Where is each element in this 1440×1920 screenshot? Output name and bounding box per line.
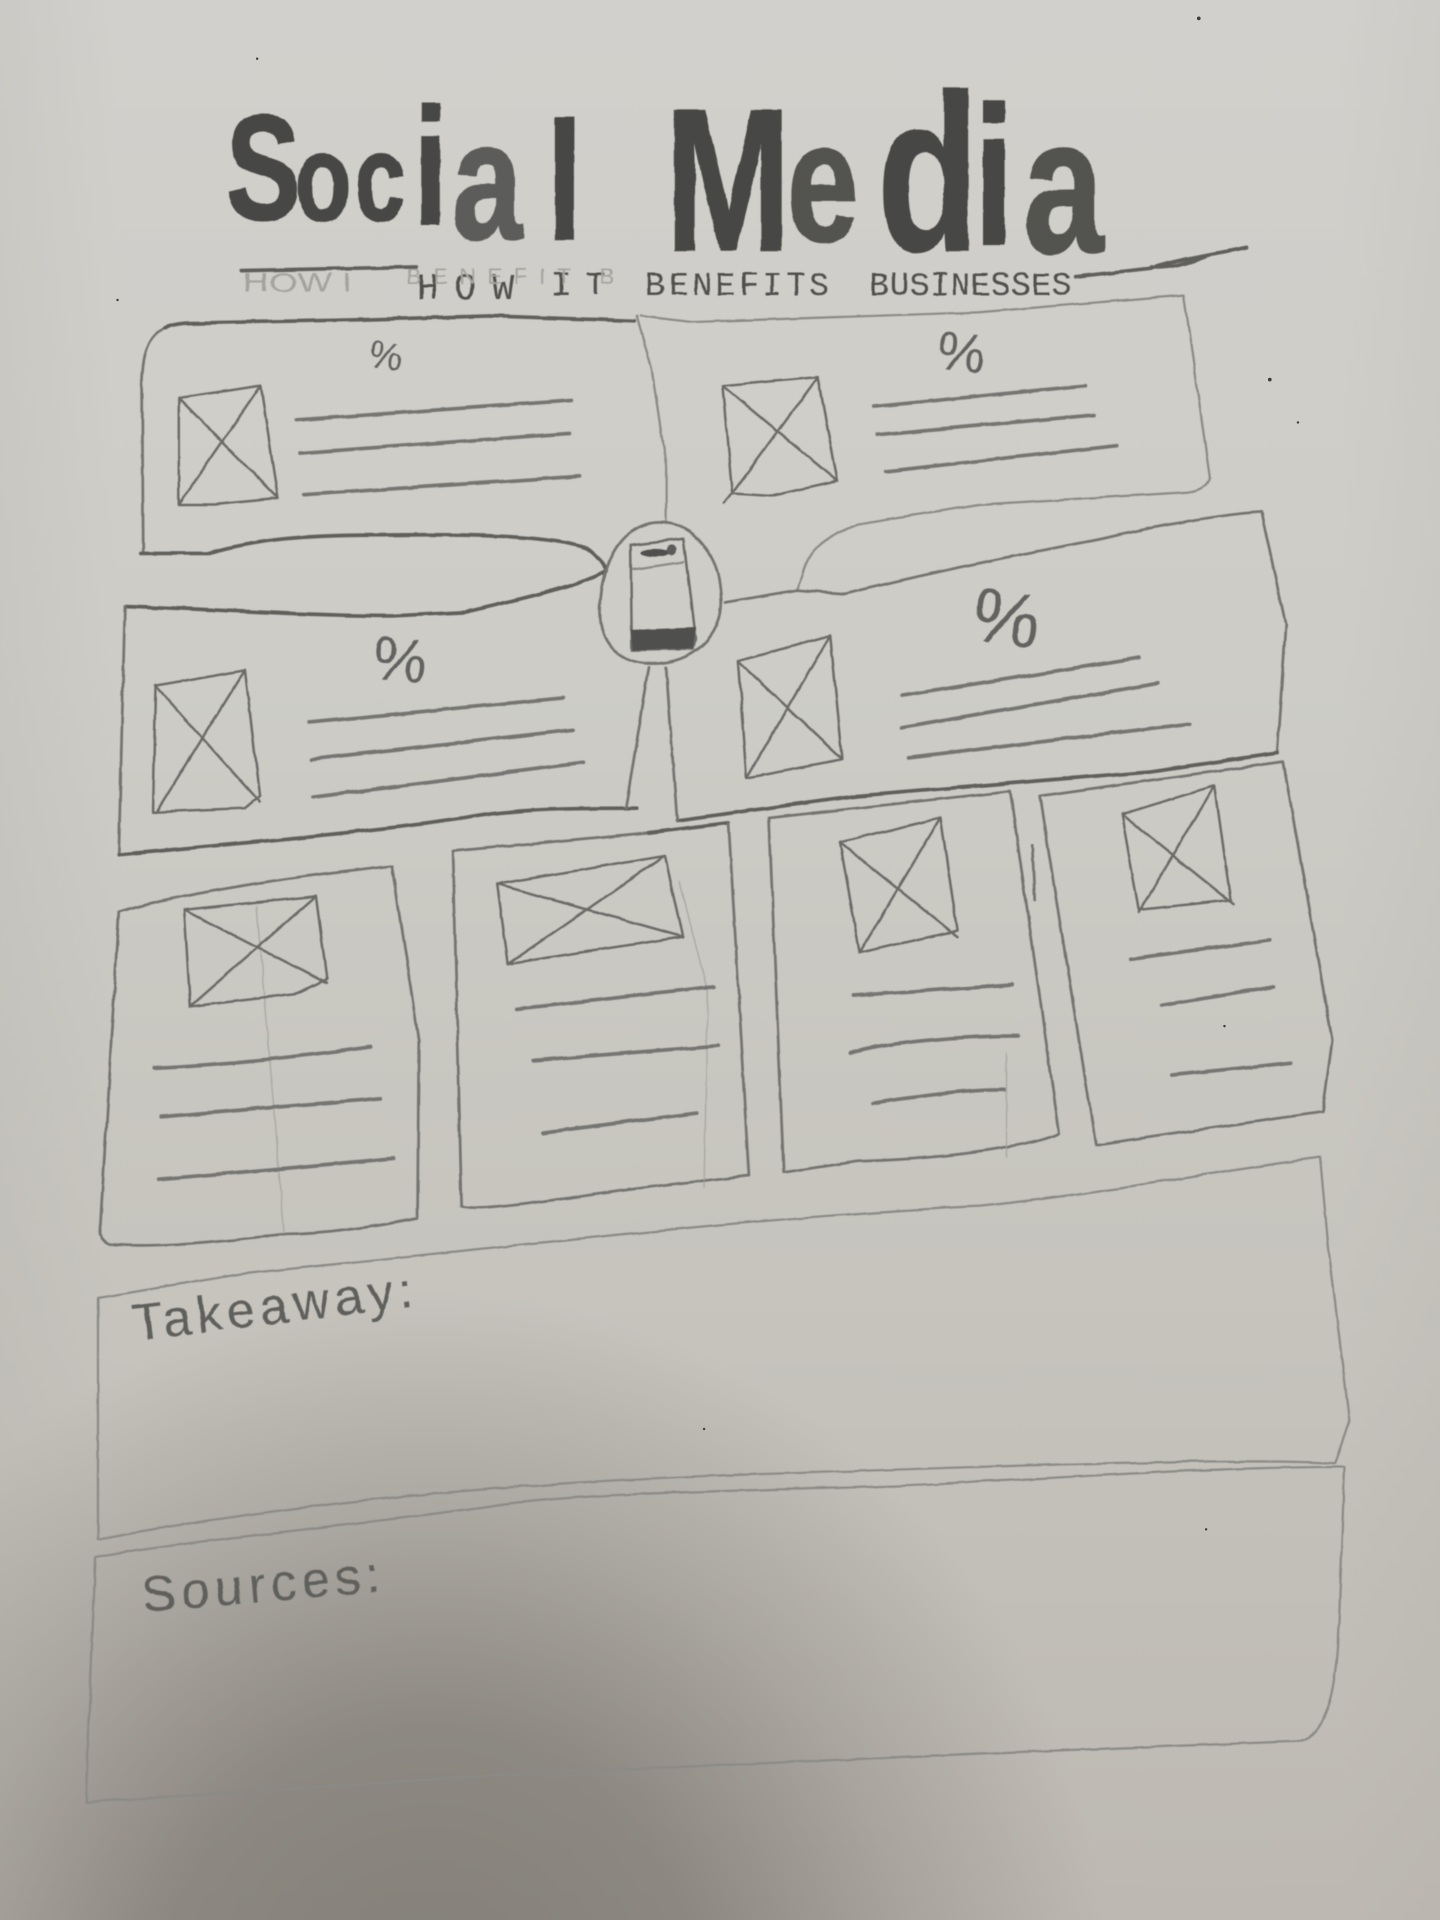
sources heading: Sources:	[139, 1545, 382, 1624]
subtitle: HOW I	[242, 267, 353, 297]
percent label: %	[934, 321, 988, 385]
connector: top centre to phone	[637, 316, 666, 524]
takeaway heading: Takeaway:	[129, 1260, 416, 1352]
image placeholder	[722, 377, 838, 503]
image placeholder	[153, 670, 260, 812]
image placeholder	[1122, 786, 1233, 912]
panel: lower card 4	[1040, 762, 1332, 1145]
percent label: %	[967, 572, 1046, 665]
panel: top right stat card	[640, 295, 1210, 590]
percent label: %	[366, 333, 405, 380]
image placeholder	[738, 636, 842, 778]
text lines	[309, 698, 583, 797]
text lines	[154, 1047, 393, 1179]
text lines	[296, 400, 579, 495]
panel: middle left stat card	[119, 571, 649, 855]
title: e	[787, 87, 859, 279]
title: S	[226, 83, 301, 251]
panel: middle right stat card	[666, 512, 1286, 820]
title: i	[413, 75, 448, 260]
image placeholder	[497, 856, 683, 964]
panel: lower card 1	[100, 866, 419, 1245]
panel: sources	[86, 1467, 1344, 1802]
panel: takeaway	[98, 1157, 1349, 1539]
subtitle underline strokes	[241, 247, 1247, 277]
text lines	[901, 658, 1190, 758]
title: i	[973, 66, 1014, 286]
image placeholder	[179, 386, 278, 504]
subtitle: BENEFIT B	[407, 264, 615, 289]
title	[226, 48, 1105, 297]
title: c	[354, 110, 406, 246]
text lines	[1130, 940, 1291, 1075]
image placeholder	[840, 818, 958, 953]
subtitle: HOW	[416, 269, 515, 311]
subtitle: IT	[551, 267, 606, 306]
text lines	[874, 386, 1117, 471]
panel: top left stat card	[141, 316, 634, 569]
subtitle	[242, 264, 1071, 311]
icon: phone in circle	[600, 523, 721, 664]
subtitle: BENEFITS	[645, 267, 829, 305]
text lines	[517, 987, 719, 1133]
text lines	[850, 984, 1019, 1103]
title: M	[665, 67, 791, 293]
title: a	[452, 86, 523, 275]
panel: lower card 3	[769, 791, 1059, 1172]
title: o	[295, 110, 351, 246]
percent label: %	[370, 623, 431, 696]
title: d	[877, 48, 979, 297]
title: l	[547, 89, 617, 275]
panel: lower card 2	[453, 823, 749, 1208]
image placeholder	[184, 896, 327, 1007]
title: a	[1023, 78, 1105, 294]
subtitle: BUSINESSES	[869, 267, 1071, 305]
